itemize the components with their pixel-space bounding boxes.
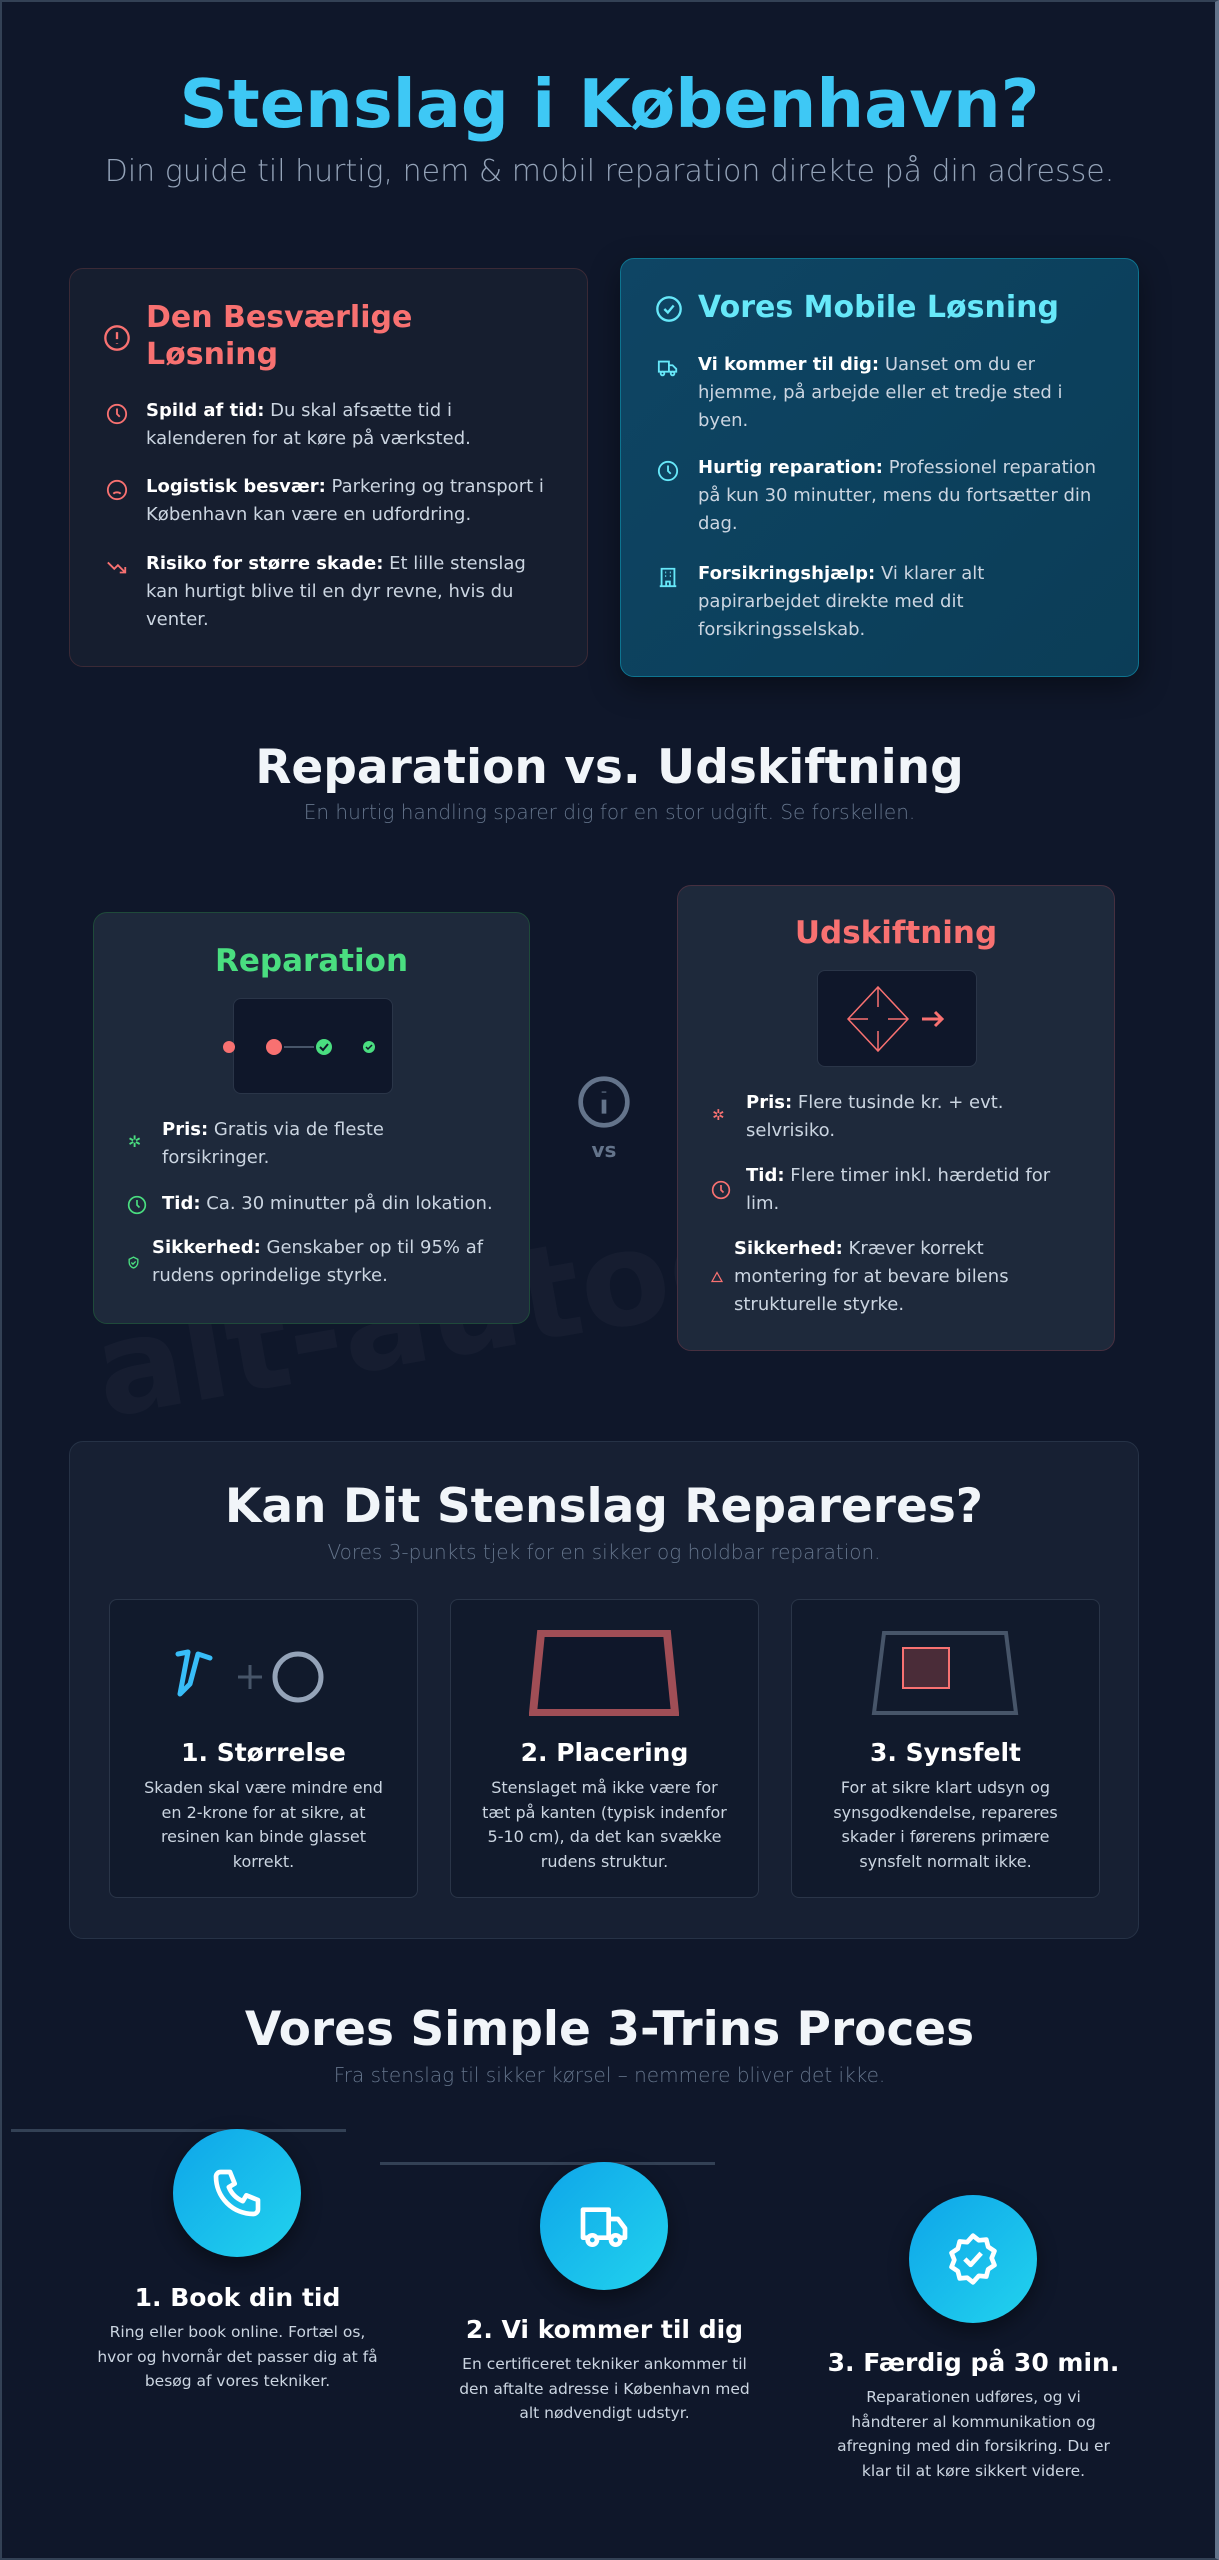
text <box>459 2315 750 2422</box>
item: tid: lim. <box>746 1193 779 1214</box>
panel: udskiftning <box>677 885 1115 1351</box>
icon: vs info: vs <box>592 1138 616 1162</box>
item 3: venter. <box>146 609 209 630</box>
card: synsfelt <box>791 1599 1100 1898</box>
text: Reparationen udføres, og vi <box>866 2388 1081 2406</box>
item: sikkerhed: strukturelle styrke. <box>734 1294 904 1315</box>
item: pris: selvrisiko. <box>746 1120 835 1141</box>
text: håndterer al kommunikation og <box>851 2412 1096 2430</box>
heading: 2. Placering <box>521 1738 688 1767</box>
text: besøg af vores tekniker. <box>145 2372 330 2390</box>
text: 1. Book din tid <box>135 2283 340 2312</box>
item 3 <box>146 553 526 630</box>
item 2 <box>146 476 544 525</box>
text: synsfelt normalt ikke. <box>859 1852 1032 1870</box>
heading: Løsning <box>146 337 278 372</box>
item 3: Forsikringshjælp: Vi klarer alt <box>698 563 984 584</box>
heading <box>146 300 412 372</box>
item 1: Spild af tid: Du skal afsætte tid i <box>146 400 452 421</box>
item 2: på kun 30 minutter, mens du fortsætter din <box>698 485 1091 506</box>
icon: windshield edge <box>529 1630 679 1716</box>
item 1 <box>146 400 471 449</box>
text: hvor og hvornår det passer dig at få <box>97 2348 378 2366</box>
text: resinen kan binde glasset <box>161 1827 366 1846</box>
text <box>828 2348 1119 2480</box>
panel: reparation: ✲ <box>128 1132 141 1151</box>
subtitle: Din guide til hurtig, nem & mobil reparation direkte på din adresse. <box>105 154 1114 189</box>
heading: Udskiftning <box>795 915 997 951</box>
item 3 <box>698 563 984 640</box>
item: pris <box>162 1119 384 1168</box>
text <box>97 2283 378 2390</box>
item: sikkerhed <box>152 1237 484 1286</box>
item: pris: Pris: Flere tusinde kr. + evt. <box>746 1092 1004 1113</box>
item: sikkerhed: montering for at bevare bilens <box>734 1266 1009 1287</box>
subtitle: process: Fra stenslag til sikker kørsel – nemmere bliver det ikke. <box>334 2063 885 2087</box>
text: synsgodkendelse, repareres <box>833 1802 1058 1822</box>
step 3 <box>828 2195 1119 2480</box>
text: den aftalte adresse i København med <box>459 2380 750 2398</box>
item 2: Hurtig reparation: Professionel reparation <box>698 457 1096 478</box>
item: sikkerhed <box>734 1238 1009 1315</box>
illustration: repair <box>233 998 393 1094</box>
text: en 2-krone for at sikre, at <box>162 1802 366 1822</box>
text: skader i førerens primære <box>842 1827 1050 1846</box>
icon: view field <box>872 1631 1018 1715</box>
item 1: Vi kommer til dig: Uanset om du er <box>698 354 1035 375</box>
text: Skaden skal være mindre end <box>144 1778 383 1797</box>
heading: 3. Synsfelt <box>870 1738 1021 1767</box>
item: sikkerhed: Sikkerhed: Kræver korrekt <box>734 1238 984 1259</box>
item: sikkerhed: rudens oprindelige styrke. <box>152 1265 388 1286</box>
heading: Vores Mobile Løsning <box>698 290 1059 325</box>
card: placering <box>450 1599 759 1898</box>
icon: vs info <box>578 1076 630 1162</box>
heading: Kan Dit Stenslag Repareres? <box>225 1479 983 1534</box>
item 1: byen. <box>698 410 748 431</box>
text: afregning med din forsikring. Du er <box>837 2437 1110 2455</box>
panel: kan dit stenslag repareres <box>69 1441 1139 1939</box>
item 3: papirarbejdet direkte med dit <box>698 591 964 612</box>
text: En certificeret tekniker ankommer til <box>462 2355 747 2373</box>
heading: process: Vores Simple 3-Trins Proces <box>245 2002 974 2057</box>
watermark: alt-autoglas <box>84 1145 979 1447</box>
item 3: forsikringsselskab. <box>698 619 865 640</box>
item 2 <box>698 457 1096 534</box>
text: alt nødvendigt udstyr. <box>519 2404 690 2422</box>
title: Stenslag i København? <box>179 65 1040 143</box>
step 2 <box>459 2162 750 2422</box>
icon: badge check <box>909 2195 1037 2323</box>
item: pris: forsikringer. <box>162 1147 269 1168</box>
item 3: Risiko for større skade: Et lille stenslag <box>146 553 526 574</box>
text: Ring eller book online. Fortæl os, <box>110 2323 365 2341</box>
item: tid: Tid: Flere timer inkl. hærdetid for <box>746 1165 1050 1186</box>
icon: alert <box>104 325 130 351</box>
step 1 <box>97 2129 378 2390</box>
text <box>482 1778 727 1870</box>
item 1: hjemme, på arbejde eller et tredje sted i <box>698 382 1063 403</box>
text: korrekt. <box>233 1852 294 1870</box>
item: pris: Pris: Gratis via de fleste <box>162 1119 384 1140</box>
item 2: Logistisk besvær: Parkering og transport i <box>146 476 544 497</box>
text: klar til at køre sikkert videre. <box>862 2462 1085 2480</box>
icon: check circle <box>656 296 682 322</box>
icon: size <box>176 1650 324 1702</box>
heading: Den Besværlige <box>146 300 412 335</box>
subtitle: Vores 3-punkts tjek for en sikker og holdbar reparation. <box>327 1540 881 1564</box>
icon: truck <box>540 2162 668 2290</box>
panel: udskiftning: ✲ <box>712 1106 725 1124</box>
item 2: dag. <box>698 513 738 534</box>
heading: 1. Størrelse <box>181 1738 346 1767</box>
item 1 <box>698 354 1063 431</box>
text: 5-10 cm), da det kan svække <box>488 1827 721 1846</box>
panel: reparation <box>93 912 530 1324</box>
panel: solution <box>620 258 1139 677</box>
item: pris <box>746 1092 1004 1141</box>
text: rudens struktur. <box>541 1852 668 1870</box>
text: tæt på kanten (typisk indenfor <box>482 1802 727 1822</box>
heading: vs section: Reparation vs. Udskiftning <box>255 740 964 795</box>
item: tid: Tid: Ca. 30 minutter på din lokation. <box>162 1193 493 1214</box>
text: 3. Færdig på 30 min. <box>828 2348 1119 2377</box>
heading: Reparation <box>215 943 408 979</box>
item: tid <box>746 1165 1050 1214</box>
icon: phone <box>173 2129 301 2257</box>
text <box>144 1778 383 1870</box>
item 1: kalenderen for at køre på værksted. <box>146 428 471 449</box>
subtitle: vs section: En hurtig handling sparer dig for en stor udgift. Se forskellen. <box>304 800 915 824</box>
text: Stenslaget må ikke være for <box>491 1778 718 1797</box>
text <box>833 1778 1058 1870</box>
item 2: København kan være en udfordring. <box>146 504 471 525</box>
item: sikkerhed: Sikkerhed: Genskaber op til 95% af <box>152 1237 483 1258</box>
card: størrelse <box>109 1599 418 1898</box>
text: 2. Vi kommer til dig <box>466 2315 743 2344</box>
item 3: kan hurtigt blive til en dyr revne, hvis du <box>146 581 513 602</box>
illustration: replace <box>817 970 977 1067</box>
text: For at sikre klart udsyn og <box>841 1778 1050 1797</box>
panel: problem <box>69 268 588 667</box>
